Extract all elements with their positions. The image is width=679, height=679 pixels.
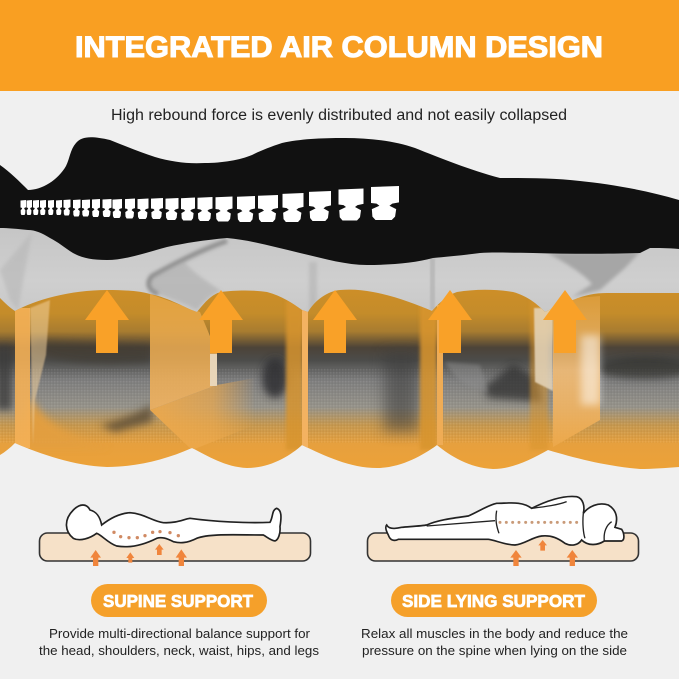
side description: Relax all muscles in the body and reduce the (361, 626, 628, 641)
supine description: Provide multi-directional balance support for (49, 626, 311, 641)
supine description: the head, shoulders, neck, waist, hips, and legs (39, 643, 320, 658)
side mattress (368, 533, 638, 561)
supine label pill (91, 584, 267, 617)
supine description (39, 626, 320, 658)
supine mattress (40, 533, 310, 561)
arrow 4 (428, 290, 472, 353)
side label pill (391, 584, 597, 617)
translucent light strips (15, 308, 30, 448)
panel: side lying support (361, 496, 638, 658)
supine pressure arrows (90, 544, 187, 566)
header banner (0, 0, 679, 91)
air chambers (0, 285, 679, 475)
side description (361, 626, 628, 658)
panel: supine support (39, 505, 320, 658)
black body silhouette (0, 137, 679, 265)
side glow and dark folds (100, 404, 152, 432)
support arrows (85, 290, 587, 353)
spine vertebrae (20, 186, 399, 222)
panel: air column cross-section (0, 225, 679, 475)
side description: pressure on the spine when lying on the side (362, 643, 627, 658)
side pressure arrows (510, 540, 578, 566)
arrow 1 (85, 290, 129, 353)
arrow 2 (199, 290, 243, 353)
title: INTEGRATED AIR COLUMN DESIGN (75, 31, 603, 64)
supine body (66, 505, 281, 547)
arrow 5 (543, 290, 587, 353)
foam top layer (0, 225, 679, 320)
subtitle: High rebound force is evenly distributed and not easily collapsed (111, 107, 567, 124)
arrow 3 (313, 290, 357, 353)
left chamber shading (0, 345, 12, 410)
knit texture (0, 368, 679, 443)
side label: SIDE LYING SUPPORT (402, 591, 585, 611)
supine label: SUPINE SUPPORT (103, 591, 253, 611)
side body (386, 496, 624, 545)
